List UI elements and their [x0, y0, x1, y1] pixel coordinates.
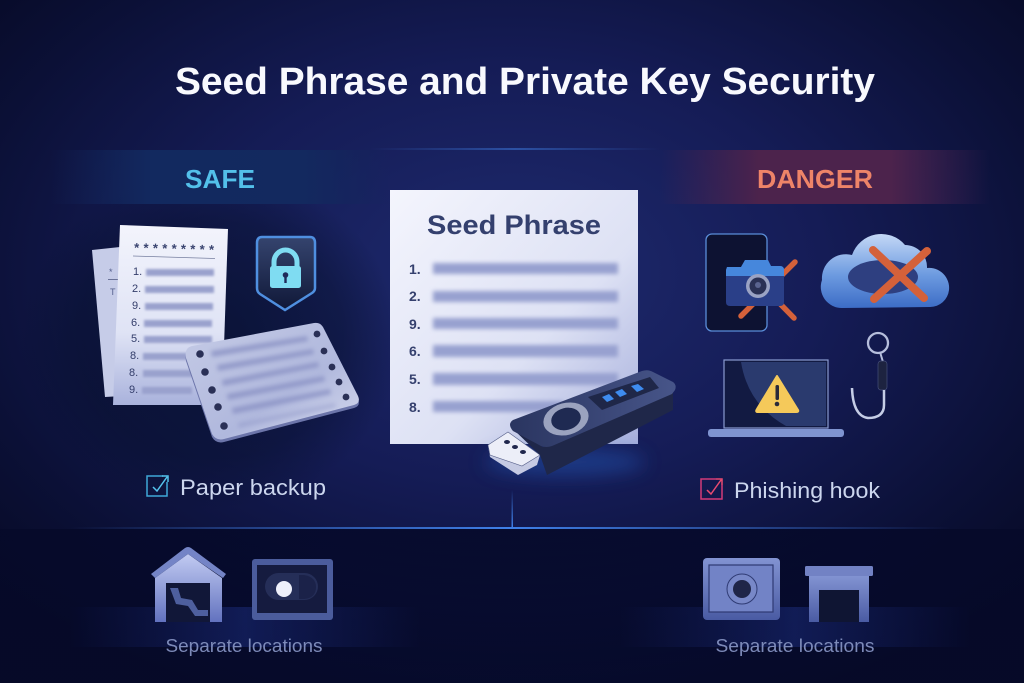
icon: phone with crossed-out camera — [706, 234, 795, 331]
seed phrase sheet: 1. — [409, 261, 421, 277]
paper backup label: Paper backup — [180, 475, 326, 500]
danger header — [660, 150, 990, 204]
icon: cloud crossed out — [821, 234, 949, 308]
danger header: DANGER — [757, 164, 873, 194]
icon: house — [151, 547, 226, 622]
icon: paper backup sheets: 8. — [130, 350, 139, 362]
safe locations caption: Separate locations — [166, 636, 322, 656]
lower divider — [70, 490, 950, 529]
icon: paper backup sheets: * — [109, 267, 113, 277]
danger locations caption: Separate locations — [716, 636, 874, 656]
seed phrase sheet: 5. — [409, 371, 421, 387]
seed phrase sheet: 6. — [409, 343, 421, 359]
safe header — [50, 150, 390, 204]
icon: lock shield — [257, 237, 315, 310]
icon: paper backup sheets: T — [110, 287, 116, 297]
title: Seed Phrase and Private Key Security — [175, 61, 875, 103]
seed phrase sheet — [390, 190, 638, 444]
icon: paper backup sheets: ********* — [134, 240, 215, 257]
seed phrase sheet: 9. — [409, 316, 421, 332]
icon: phishing hook — [852, 333, 888, 418]
icon: storage building — [805, 566, 873, 622]
top divider line — [370, 148, 660, 150]
icon: paper backup sheets: 9. — [132, 300, 141, 312]
safe header: SAFE — [185, 164, 255, 194]
seed phrase sheet: 2. — [409, 288, 421, 304]
icon: paper backup sheets: 9. — [129, 384, 138, 396]
icon: wall safe — [252, 559, 333, 620]
icon: paper backup sheets: 6. — [131, 317, 140, 329]
panel: danger — [660, 150, 990, 503]
panel: safe — [50, 150, 390, 500]
panel: danger locations — [620, 558, 970, 656]
icon: paper backup sheets: 2. — [132, 283, 141, 295]
panel: safe locations — [70, 547, 420, 656]
icon: hardware wallet usb — [485, 370, 676, 476]
icon: paper backup sheets: 5. — [131, 333, 140, 345]
phishing hook label: Phishing hook — [734, 478, 881, 503]
icon: round-dial safe — [703, 558, 780, 620]
left panel shade — [20, 170, 400, 510]
icon: paper backup sheets: 1. — [133, 266, 142, 278]
icon: metal backup plate — [186, 323, 359, 442]
panel: seed phrase — [390, 190, 676, 476]
icon: paper backup sheets: 8. — [129, 367, 138, 379]
lower band shade — [0, 529, 1024, 683]
icon: paper backup sheets — [92, 225, 228, 405]
icon: laptop with warning — [708, 360, 844, 437]
seed phrase sheet: Seed Phrase — [427, 210, 601, 240]
seed phrase sheet: 8. — [409, 399, 421, 415]
